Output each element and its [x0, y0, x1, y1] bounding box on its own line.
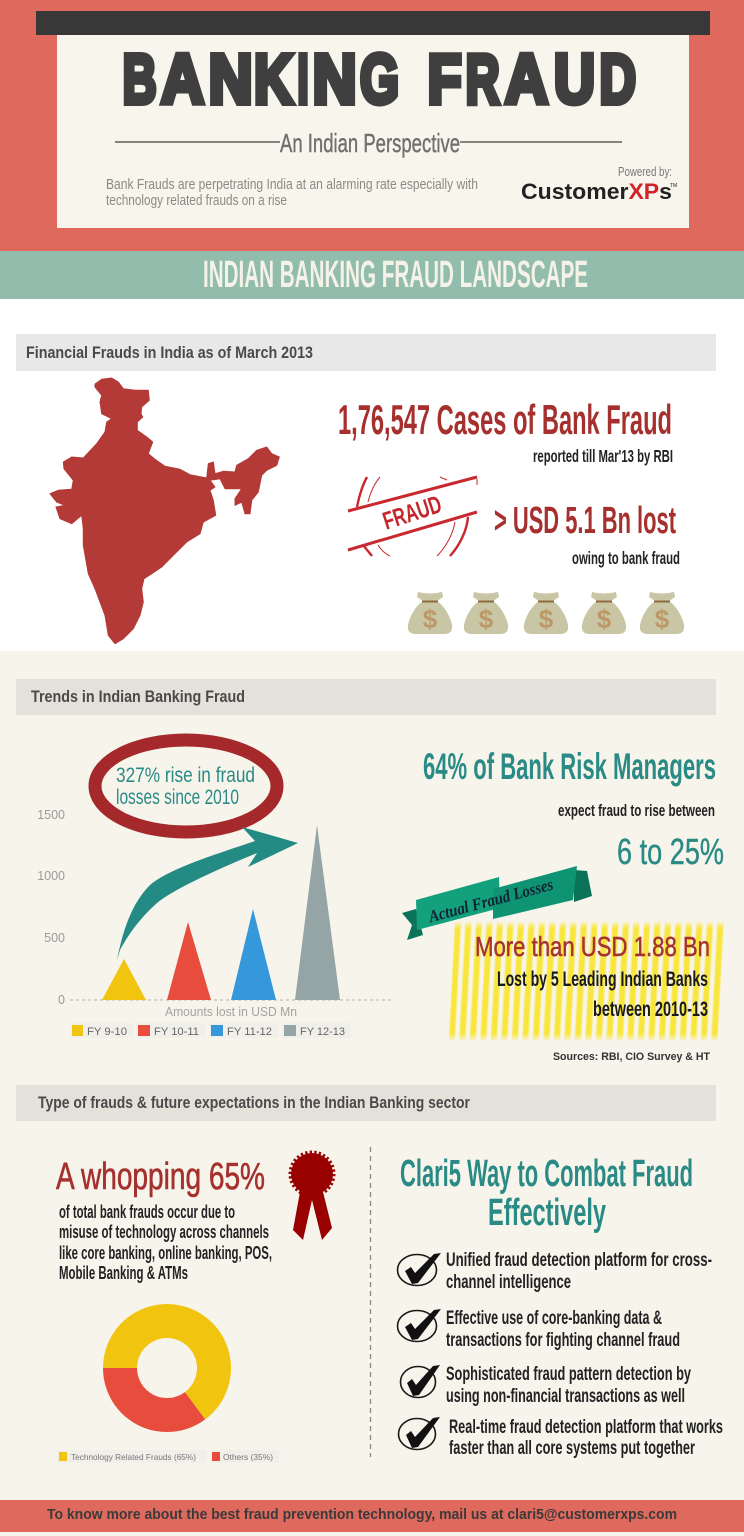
stat: whopping 65%: of total bank frauds occur due to [59, 1202, 235, 1222]
section heading: Type of frauds & future expectations in the Indian Banking sector [38, 1094, 470, 1112]
icon: money bag 5: $ [655, 604, 670, 634]
axis labels: 500 [44, 931, 65, 945]
title: I [297, 40, 309, 118]
icon: money bag 2: $ [479, 604, 494, 634]
title: B [123, 40, 157, 118]
stat: whopping 65%: misuse of technology across channels [59, 1222, 269, 1242]
heading: Clari5 way: Effectively [488, 1192, 606, 1234]
banner: landscape heading [0, 251, 744, 299]
icon: award rosette [290, 1152, 334, 1240]
footer [0, 1500, 744, 1532]
chart: donut [103, 1304, 231, 1432]
icon: money bag 2 [464, 592, 508, 634]
icon: fraud stamp [348, 477, 477, 556]
title: N [209, 40, 253, 118]
icon: money bag 3: $ [539, 604, 554, 634]
callout: 327% rise: losses since 2010 [116, 786, 239, 809]
icon: money bag 1: $ [423, 604, 438, 634]
icon: check 2 [398, 1309, 441, 1342]
header card [57, 35, 689, 228]
arrow: upward trend [117, 827, 298, 960]
section heading [16, 679, 716, 715]
icon: money bag 3 [524, 592, 568, 634]
lower page background [0, 651, 744, 1536]
chart: amounts lost [37, 808, 392, 1038]
footer: To know more about the best fraud prevention technology, mail us at clari5@customerxps.com [47, 1507, 677, 1523]
subtitle with rules: An Indian Perspective [280, 128, 460, 158]
legend: FY 12-13 [300, 1026, 345, 1038]
powered by logo: Powered by: [618, 165, 672, 179]
section heading [16, 334, 716, 371]
header bar [36, 11, 710, 35]
icon: check 1 [398, 1253, 441, 1286]
ribbon: actual fraud losses [402, 866, 592, 940]
icon: check 3 [400, 1365, 440, 1398]
icon: money bag 4: $ [597, 604, 612, 634]
powered by logo: CustomerXPs [521, 179, 672, 204]
list: item 4 [398, 1417, 723, 1459]
title: R [466, 40, 500, 118]
axis labels [37, 808, 65, 1007]
stat: USD lost: owing to bank fraud [572, 548, 680, 568]
heading: Clari5 way [400, 1153, 693, 1234]
legend: FY 10-11 [154, 1026, 199, 1038]
title: F [428, 40, 462, 118]
icon: fraud stamp: FRAUD [379, 490, 445, 536]
legend: FY 11-12 [227, 1026, 272, 1038]
intro text: Bank Frauds are perpetrating India at an alarming rate especially with [106, 177, 478, 193]
bar: FY 10-11 [167, 922, 211, 1000]
title: U [554, 40, 595, 118]
panel: header [0, 0, 744, 251]
panel: types of frauds [16, 1085, 723, 1463]
title: N [313, 40, 357, 118]
stat: cases of bank fraud [338, 396, 673, 466]
title: D [600, 40, 636, 118]
title: G [360, 40, 399, 118]
icon: money bag 4 [582, 592, 626, 634]
stat: whopping 65%: A whopping 65% [56, 1156, 265, 1198]
powered by logo: TM [670, 183, 677, 189]
stat: risk managers [423, 746, 724, 872]
bar: FY 9-10 [102, 959, 146, 1000]
title: A [505, 40, 548, 118]
intro text [106, 177, 478, 209]
ribbon: actual fraud losses: Actual Fraud Losses [426, 875, 555, 926]
panel: trends in Indian banking fraud [16, 679, 724, 1063]
callout: stripes and actual losses [449, 922, 724, 1040]
title: A [161, 40, 204, 118]
section heading: Trends in Indian Banking Fraud [31, 688, 245, 706]
legend: donut [57, 1450, 279, 1463]
panel: financial frauds in India [16, 334, 716, 644]
list: item 3 [400, 1364, 691, 1407]
icon: money bag 5 [640, 592, 684, 634]
stat: whopping 65%: Mobile Banking & ATMs [59, 1263, 188, 1283]
intro text: technology related frauds on a rise [106, 193, 287, 209]
list: item 1: channel intelligence [446, 1272, 571, 1293]
icon: check 4 [398, 1417, 440, 1450]
stat: cases of bank fraud: reported till Mar'13 by RBI [533, 446, 673, 466]
powered by logo [521, 165, 677, 204]
bar: FY 12-13 [295, 825, 340, 1000]
callout: 327% rise [95, 740, 277, 832]
stat: whopping 65%: like core banking, online banking, POS, [59, 1243, 272, 1263]
axis title: Amounts lost in USD Mn [165, 1005, 297, 1019]
legend [70, 1023, 351, 1038]
stat: whopping 65% [56, 1156, 272, 1283]
axis labels: 1000 [37, 869, 65, 883]
stat: USD lost [494, 500, 680, 568]
section heading [16, 1085, 716, 1121]
list: item 1 [398, 1250, 712, 1293]
legend: donut: Others (35%) [223, 1452, 273, 1462]
legend: donut: Technology Related Frauds (65%) [71, 1452, 196, 1462]
map: India [50, 378, 279, 644]
callout: 327% rise: 327% rise in fraud [116, 764, 255, 787]
axis labels: 1500 [37, 808, 65, 822]
section heading: Financial Frauds in India as of March 2013 [26, 344, 313, 362]
legend: FY 9-10 [87, 1026, 127, 1038]
bar: FY 11-12 [231, 909, 276, 1000]
icon: money bag 1 [408, 592, 452, 634]
axis labels: 0 [58, 993, 65, 1007]
title: K [254, 40, 293, 118]
list: item 2 [398, 1308, 680, 1351]
sources: Sources: RBI, CIO Survey & HT [553, 1051, 710, 1063]
icon: money bags [408, 592, 684, 634]
